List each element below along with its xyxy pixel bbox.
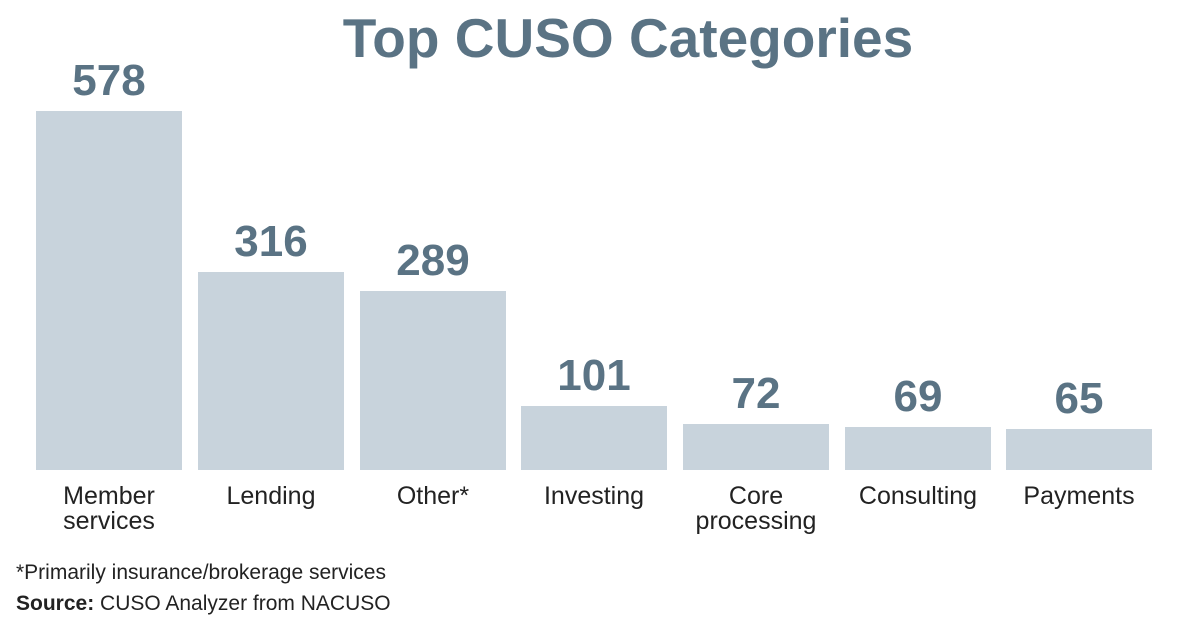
bar: Other [360,236,506,470]
label: Lending: Lending [226,482,315,510]
label: Core processing: processing [696,507,816,535]
label: Payments: Payments [1023,482,1135,510]
bar: Investing: 101 [557,351,631,400]
bar: Payments: 65 [1055,374,1103,423]
source: Source: CUSO Analyzer from NACUSO [16,592,391,615]
bar: Member services [36,56,182,470]
axis labels [63,482,1135,535]
bar: Investing [521,351,667,470]
bar: Member services: 578 [72,56,146,105]
bar: Core processing: 72 [732,369,780,418]
label: Consulting: Consulting [859,482,977,510]
bar chart [36,56,1152,470]
bar: Core processing [683,369,829,470]
label: Core processing: Core [729,482,783,510]
label: Member services: Member [63,482,155,510]
label: Investing: Investing [544,482,644,510]
label: Other: Other* [397,482,469,510]
label: Core processing [696,482,816,535]
bar: Other: 289 [396,236,470,285]
bar: Lending [198,217,344,470]
bar: Payments [1006,374,1152,470]
bar: Lending: 316 [234,217,308,266]
footnote: *Primarily insurance/brokerage services [16,561,386,584]
title: Top CUSO Categories [343,7,913,69]
bar: Consulting [845,372,991,470]
bar: Consulting: 69 [894,372,942,421]
label: Member services [63,482,155,535]
label: Member services: services [63,507,155,535]
